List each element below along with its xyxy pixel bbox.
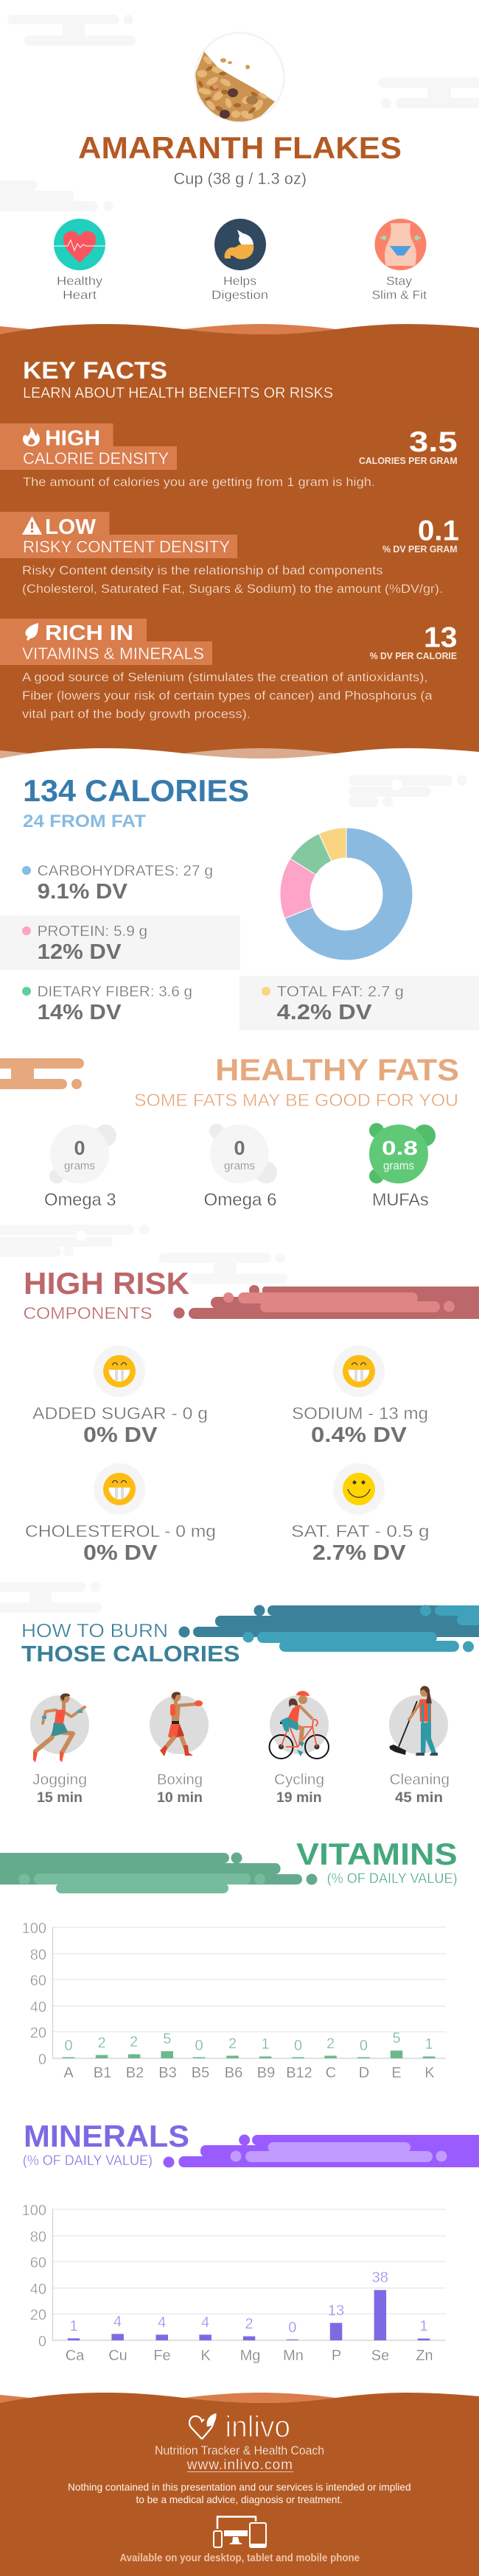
macro: protein: PROTEIN: 5.9 g <box>38 923 147 940</box>
decorative bars: healthy fats <box>0 1058 84 1089</box>
fat: omega 6: Omega 6 <box>203 1190 277 1210</box>
bar chart: vitamins: 100 <box>22 1921 46 1937</box>
bar chart: vitamins: 1 <box>424 2036 433 2052</box>
bar chart: vitamins: 20 <box>30 2025 46 2041</box>
activity: jogging: 15 min <box>37 1790 83 1806</box>
heading: calories: 134 CALORIES <box>23 773 249 808</box>
heading: vitamins: VITAMINS <box>296 1837 458 1871</box>
fat: omega 3: 0 <box>74 1137 85 1159</box>
bar chart: vitamins: K <box>424 2065 435 2081</box>
subheading: from fat: 24 FROM FAT <box>23 812 146 831</box>
activity: cycling: 19 min <box>276 1790 322 1806</box>
macro: carbohydrates: CARBOHYDRATES: 27 g <box>38 863 213 879</box>
bar chart: vitamins: B12 <box>286 2065 312 2081</box>
icon: devices <box>214 2517 266 2547</box>
bar chart: vitamins: 0 <box>64 2038 73 2054</box>
decorative bars: high risk <box>174 1285 479 1319</box>
bar chart: minerals: 1 <box>419 2318 428 2334</box>
serving size: Cup (38 g / 1.3 oz) <box>174 169 307 188</box>
benefit: healthy heart: Healthy <box>57 274 103 288</box>
benefit: stay slim and fit: Stay <box>386 274 412 288</box>
fact: rich in vitamins and minerals: RICH IN <box>45 622 133 645</box>
benefit: helps digestion: Digestion <box>211 288 268 302</box>
bar chart: vitamins: 5 <box>392 2030 401 2047</box>
heading: high risk: HIGH RISK <box>24 1266 189 1301</box>
fact: rich in vitamins and minerals: 13 <box>424 622 458 654</box>
disclaimer: to be a medical advice, diagnosis or treatment. <box>136 2494 343 2505</box>
fact: low risky content density: (Cholesterol, Saturated Fat, Sugars & Sodium) to the amount (%DV/gr). <box>22 582 443 596</box>
component: cholesterol: 0% DV <box>83 1541 158 1565</box>
bar chart: minerals: Fe <box>153 2348 171 2364</box>
disclaimer <box>68 2481 411 2505</box>
bar chart: vitamins: 5 <box>163 2031 171 2047</box>
food photo: granola flakes <box>195 32 284 122</box>
decorative bars: vitamins <box>0 1853 317 1893</box>
bar chart: vitamins: 0 <box>360 2038 368 2054</box>
heading: healthy fats: HEALTHY FATS <box>215 1052 459 1087</box>
component: sodium: 0.4% DV <box>311 1424 408 1447</box>
bar chart: minerals: 0 <box>38 2334 46 2350</box>
benefit: helps digestion: Helps <box>223 274 256 288</box>
bar chart: vitamins: 2 <box>97 2035 106 2052</box>
activity: cleaning: 45 min <box>395 1790 443 1806</box>
activity: cleaning <box>389 1686 450 1806</box>
component: sodium: SODIUM - 13 mg <box>292 1404 428 1423</box>
component: added sugar <box>32 1345 208 1447</box>
fat: omega 3: grams <box>64 1160 95 1172</box>
bar chart: minerals: Cu <box>108 2348 127 2364</box>
benefit: stay slim and fit: Slim & Fit <box>371 288 427 302</box>
fact: high calorie density: The amount of calories you are getting from 1 gram is high. <box>23 475 375 489</box>
fat: omega 6: 0 <box>234 1137 245 1159</box>
component: cholesterol <box>25 1463 216 1565</box>
bar chart: minerals: 20 <box>30 2307 46 2323</box>
bar chart: vitamins: B3 <box>158 2065 177 2081</box>
activity: boxing: 10 min <box>157 1790 203 1806</box>
bar chart: minerals: 40 <box>30 2281 46 2298</box>
fat: MUFAs: 0.8 <box>382 1137 418 1159</box>
bar chart: vitamins <box>22 1921 446 2081</box>
bar chart: minerals: 60 <box>30 2255 46 2271</box>
bar chart: vitamins: 0 <box>38 2052 46 2068</box>
bar chart: minerals: 4 <box>201 2315 209 2331</box>
fact: rich in vitamins and minerals <box>0 619 458 721</box>
fact: high calorie density: CALORIES PER GRAM <box>359 456 458 466</box>
bar chart: minerals: 4 <box>158 2315 166 2331</box>
component: saturated fat: SAT. FAT - 0.5 g <box>291 1521 429 1541</box>
benefit: stay slim and fit <box>371 219 427 302</box>
component: saturated fat: 2.7% DV <box>312 1541 406 1565</box>
fact: high calorie density: CALORIE DENSITY <box>23 449 169 468</box>
fact: rich in vitamins and minerals: VITAMINS & MINERALS <box>22 644 204 663</box>
bar chart: minerals: 100 <box>22 2203 46 2219</box>
component: sodium <box>292 1345 428 1447</box>
bar chart: minerals: 80 <box>30 2229 46 2245</box>
bar chart: minerals: 38 <box>372 2270 388 2286</box>
bar chart: vitamins: 60 <box>30 1973 46 1989</box>
bar chart: vitamins: B6 <box>225 2065 242 2081</box>
macro: protein <box>0 915 240 970</box>
fact: low risky content density: RISKY CONTENT DENSITY <box>23 538 230 556</box>
bar chart: vitamins: 1 <box>261 2036 270 2052</box>
macro: dietary fiber: 14% DV <box>38 1001 122 1024</box>
bar chart: vitamins: A <box>63 2065 74 2081</box>
fat: MUFAs: MUFAs <box>372 1190 429 1210</box>
bar chart: minerals: 0 <box>288 2320 296 2336</box>
bar chart: minerals: Mn <box>283 2348 304 2364</box>
macro: dietary fiber <box>22 984 192 1024</box>
activity: jogging <box>30 1693 89 1806</box>
bar chart: vitamins: D <box>359 2065 369 2081</box>
bar chart: vitamins: 2 <box>130 2034 138 2050</box>
fact: low risky content density: LOW <box>45 515 97 539</box>
fact: rich in vitamins and minerals: vital part of the body growth process). <box>22 707 251 721</box>
disclaimer: Nothing contained in this presentation and our services is intended or implied <box>68 2481 411 2493</box>
bar chart: minerals: 1 <box>69 2318 78 2334</box>
bar chart: minerals: 13 <box>328 2303 344 2319</box>
availability note: Available on your desktop, tablet and mobile phone <box>119 2552 360 2564</box>
bar chart: minerals <box>22 2203 446 2364</box>
bar chart: vitamins: E <box>391 2065 402 2081</box>
logo: inlivo <box>189 2410 290 2443</box>
activity: jogging: Jogging <box>32 1772 87 1788</box>
bar chart: minerals: Se <box>371 2348 389 2364</box>
fat: omega 6 <box>203 1124 277 1210</box>
bar chart: minerals: K <box>200 2348 211 2364</box>
bar chart: minerals: Zn <box>416 2348 433 2364</box>
macro: total fat: TOTAL FAT: 2.7 g <box>277 984 404 1000</box>
component: added sugar: 0% DV <box>83 1424 158 1447</box>
benefit: healthy heart <box>54 219 105 302</box>
fat: omega 3: Omega 3 <box>44 1190 116 1210</box>
logo: inlivo: inlivo <box>225 2410 290 2443</box>
website link: www.inlivo.com <box>186 2457 293 2473</box>
fat: omega 6: grams <box>224 1160 255 1172</box>
bar chart: vitamins: 0 <box>294 2038 302 2054</box>
benefit: helps digestion <box>211 219 268 302</box>
fat: MUFAs: grams <box>383 1160 414 1172</box>
macro: carbohydrates <box>22 863 213 904</box>
fact: low risky content density: % DV PER GRAM <box>382 544 458 555</box>
bar chart: vitamins: B9 <box>257 2065 275 2081</box>
bar chart: vitamins: 2 <box>228 2036 237 2052</box>
fat: MUFAs <box>369 1123 436 1210</box>
component: added sugar: ADDED SUGAR - 0 g <box>32 1404 208 1423</box>
bar chart: vitamins: 0 <box>195 2038 203 2054</box>
heading: minerals: MINERALS <box>24 2119 189 2153</box>
component: cholesterol: CHOLESTEROL - 0 mg <box>25 1521 216 1541</box>
panel: key facts <box>0 324 479 766</box>
title: AMARANTH FLAKES <box>78 130 402 165</box>
bar chart: vitamins: B5 <box>192 2065 209 2081</box>
subheading: LEARN ABOUT HEALTH BENEFITS OR RISKS <box>23 385 333 401</box>
activity: boxing <box>150 1692 209 1806</box>
activity: cycling: Cycling <box>274 1772 324 1788</box>
fact: rich in vitamins and minerals: % DV PER CALORIE <box>370 651 457 661</box>
subheading: healthy fats: SOME FATS MAY BE GOOD FOR YOU <box>134 1091 458 1111</box>
fact: low risky content density: Risky Content density is the relationship of bad components <box>22 563 383 577</box>
decorative bars: burn calories <box>178 1605 479 1653</box>
fact: high calorie density <box>0 423 458 489</box>
activity: cycling <box>270 1691 329 1806</box>
fact: low risky content density: 0.1 <box>418 515 459 546</box>
subheading: percent daily value: (% OF DAILY VALUE) <box>23 2153 153 2169</box>
bar chart: vitamins: 2 <box>326 2036 335 2052</box>
macro: total fat <box>240 976 479 1030</box>
bar chart: vitamins: 40 <box>30 1999 46 2016</box>
fact: low risky content density <box>0 512 459 596</box>
bar chart: minerals: 2 <box>245 2316 254 2332</box>
donut chart: macronutrients <box>280 828 413 960</box>
subheading: percent daily value: (% OF DAILY VALUE) <box>327 1871 458 1887</box>
fat: omega 3 <box>44 1125 116 1210</box>
macro: total fat: 4.2% DV <box>277 1001 372 1024</box>
bar chart: minerals: 4 <box>113 2314 122 2330</box>
tagline: Nutrition Tracker & Health Coach <box>155 2443 324 2457</box>
panel: footer <box>0 2393 479 2576</box>
subheading: components: COMPONENTS <box>24 1303 152 1323</box>
decorative bars: minerals <box>164 2134 479 2168</box>
bar chart: vitamins: B1 <box>94 2065 111 2081</box>
fact: high calorie density: HIGH <box>45 427 100 451</box>
component: saturated fat <box>291 1463 429 1565</box>
bar chart: minerals: Mg <box>240 2348 260 2364</box>
bar chart: minerals: Ca <box>66 2348 85 2364</box>
fact: high calorie density: 3.5 <box>409 426 458 458</box>
activity: cleaning: Cleaning <box>390 1772 450 1788</box>
bar chart: minerals: P <box>332 2348 341 2364</box>
activity: boxing: Boxing <box>157 1772 203 1788</box>
macro: dietary fiber: DIETARY FIBER: 3.6 g <box>38 984 192 1000</box>
bar chart: vitamins: C <box>326 2065 336 2081</box>
heading: key facts: KEY FACTS <box>23 357 167 384</box>
fact: rich in vitamins and minerals: A good source of Selenium (stimulates the creation of antioxidants), <box>22 670 427 684</box>
benefit: healthy heart: Heart <box>63 288 97 302</box>
fact: rich in vitamins and minerals: Fiber (lowers your risk of certain types of cancer) and Phosphorus (a <box>22 689 433 703</box>
macro: protein: 12% DV <box>38 940 122 964</box>
bar chart: vitamins: B2 <box>126 2065 144 2081</box>
bar chart: vitamins: 80 <box>30 1947 46 1963</box>
heading: how to burn: HOW TO BURN <box>21 1619 168 1641</box>
heading: those calories: THOSE CALORIES <box>21 1641 240 1667</box>
macro: carbohydrates: 9.1% DV <box>38 880 128 904</box>
